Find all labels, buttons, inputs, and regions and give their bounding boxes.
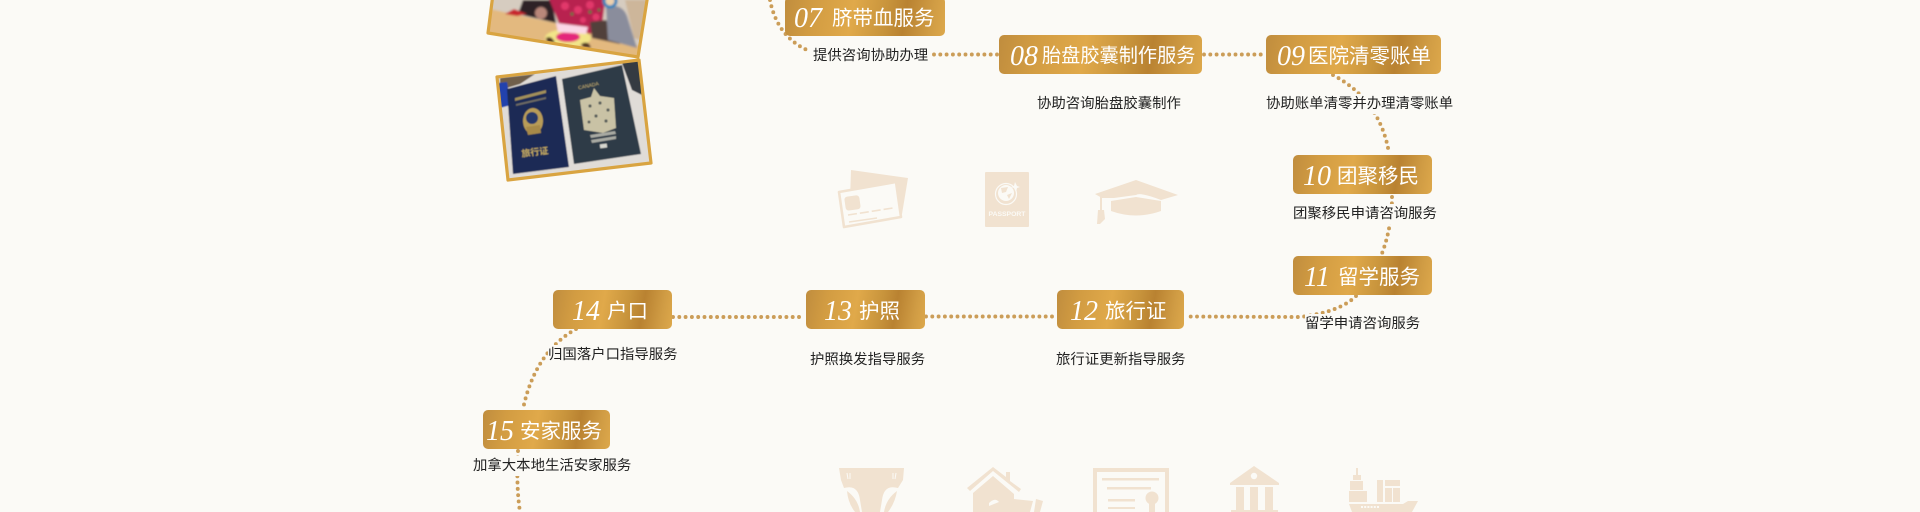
icon: passport: PASSPORT bbox=[989, 211, 1026, 218]
icon: house bbox=[967, 467, 1043, 512]
icon: graduation cap bbox=[1095, 180, 1178, 224]
badge 09: 09 bbox=[1277, 40, 1305, 72]
icon: museum bank bbox=[1230, 466, 1279, 512]
icon: diaper bbox=[839, 468, 904, 512]
icon: bank cards bbox=[839, 170, 908, 227]
badge 07: 07 bbox=[794, 2, 822, 34]
badge 11: 11 bbox=[1304, 262, 1330, 292]
badge 10: 团聚移民 bbox=[1337, 164, 1419, 188]
icon: certificate bbox=[1093, 468, 1169, 512]
badge 08: 08 bbox=[1010, 40, 1038, 72]
badge 11 bbox=[1293, 256, 1432, 295]
description 11: 留学申请咨询服务 bbox=[1305, 316, 1420, 332]
badge 15: 15 bbox=[486, 416, 514, 446]
badge 11: 留学服务 bbox=[1338, 266, 1420, 288]
icon: cargo ship bbox=[1349, 468, 1418, 512]
badge 08 bbox=[999, 35, 1202, 74]
photos bbox=[486, 0, 653, 182]
description 13: 护照换发指导服务 bbox=[810, 352, 925, 368]
description 08: 协助咨询胎盘胶囊制作 bbox=[1037, 96, 1181, 112]
description 07: 提供咨询协助办理 bbox=[813, 48, 928, 64]
badge 10: 10 bbox=[1303, 160, 1331, 192]
description 14: 归国落户口指导服务 bbox=[548, 347, 678, 363]
badge 14: 户口 bbox=[607, 300, 648, 322]
photo: birthday celebration bbox=[486, 0, 649, 58]
badge 12: 12 bbox=[1070, 296, 1098, 326]
photo: passports bbox=[495, 58, 653, 182]
description 12: 旅行证更新指导服务 bbox=[1056, 352, 1186, 368]
badge 12: 旅行证 bbox=[1105, 300, 1166, 322]
badge 15 bbox=[483, 410, 610, 449]
badge 13: 13 bbox=[824, 296, 852, 326]
photo: passports: 旅行证 bbox=[521, 145, 549, 159]
badge 13 bbox=[806, 290, 925, 329]
description 15: 加拿大本地生活安家服务 bbox=[473, 458, 631, 474]
badge 07: 脐带血服务 bbox=[832, 6, 934, 30]
photo: passports: CANADA bbox=[578, 81, 600, 91]
badge 07 bbox=[785, 0, 945, 36]
badge 15: 安家服务 bbox=[520, 420, 602, 442]
badge 10 bbox=[1293, 155, 1432, 194]
badge 09 bbox=[1266, 35, 1441, 74]
description 10: 团聚移民申请咨询服务 bbox=[1293, 206, 1437, 222]
description 09: 协助账单清零并办理清零账单 bbox=[1266, 96, 1453, 112]
badge 14 bbox=[553, 290, 672, 329]
badge 08: 胎盘胶囊制作服务 bbox=[1042, 46, 1196, 66]
badge 12 bbox=[1057, 290, 1184, 329]
icon: passport bbox=[985, 172, 1029, 227]
badge 14: 14 bbox=[572, 296, 600, 326]
badge 13: 护照 bbox=[859, 300, 900, 322]
badge 09: 医院清零账单 bbox=[1308, 44, 1431, 68]
